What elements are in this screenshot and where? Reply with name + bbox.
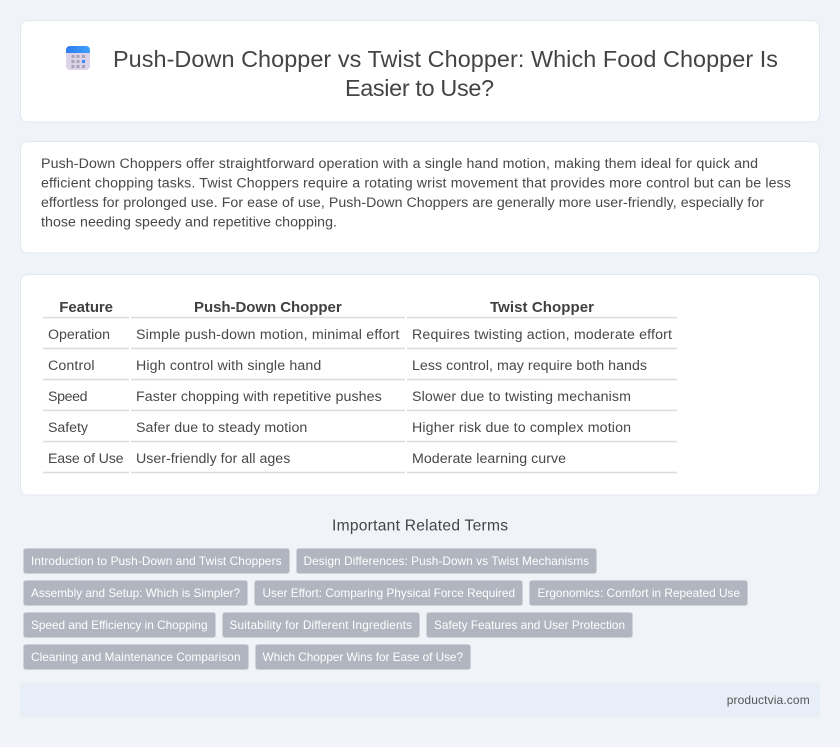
- chip: Assembly and Setup: Which is Simpler?: [31, 586, 240, 600]
- table row: ease of use: Moderate learning curve: [412, 451, 566, 467]
- text block: summary paragraph: [41, 156, 791, 230]
- title: Easier to Use?: [345, 75, 494, 101]
- text block: summary paragraph: effortless for prolonged use. For ease of use, Push-Down Choppers are generally more user-friendly, especially for: [41, 195, 764, 211]
- table row: safety: Higher risk due to complex motion: [412, 420, 631, 436]
- table header: Twist Chopper: [490, 299, 594, 316]
- table header: Push-Down Chopper: [194, 299, 342, 316]
- chip: Ergonomics: Comfort in Repeated Use: [538, 586, 740, 600]
- chip: User Effort: Comparing Physical Force Required: [262, 586, 515, 600]
- panel: header: [20, 20, 820, 122]
- table row: operation: Simple push-down motion, minimal effort: [136, 327, 399, 343]
- table row: control: High control with single hand: [136, 358, 321, 374]
- icon: calendar: [66, 46, 90, 70]
- chip: [24, 644, 248, 670]
- footer: productvia.com: [727, 693, 810, 707]
- chip: Design Differences: Push-Down vs Twist Mechanisms: [304, 554, 589, 568]
- footer: [20, 683, 820, 717]
- table row: speed: Faster chopping with repetitive pushes: [136, 389, 382, 405]
- title: [113, 46, 778, 101]
- table row: operation: Requires twisting action, moderate effort: [412, 327, 672, 343]
- table row: control: Control: [48, 358, 94, 374]
- table header: [59, 299, 594, 316]
- chip: Which Chopper Wins for Ease of Use?: [262, 650, 463, 664]
- panel: related term chips: [24, 548, 748, 670]
- chip: [222, 612, 420, 638]
- chip: Cleaning and Maintenance Comparison: [31, 650, 240, 664]
- chip: Suitability for Different Ingredients: [230, 618, 412, 632]
- panel: comparison table: [20, 274, 820, 495]
- chip: [256, 644, 470, 670]
- table row: speed: Slower due to twisting mechanism: [412, 389, 631, 405]
- chip: [296, 548, 596, 574]
- chip: Safety Features and User Protection: [434, 618, 625, 632]
- heading: related terms: Important Related Terms: [332, 518, 508, 534]
- chip: [426, 612, 632, 638]
- table row: safety: Safety: [48, 420, 89, 436]
- chip: [254, 580, 522, 606]
- table row: control: [48, 358, 647, 374]
- chip: Speed and Efficiency in Chopping: [31, 618, 208, 632]
- table row: safety: Safer due to steady motion: [136, 420, 307, 436]
- chip: [530, 580, 748, 606]
- chip: [24, 548, 290, 574]
- table row: safety: [48, 420, 631, 436]
- table row: speed: [48, 389, 631, 405]
- title: Push-Down Chopper vs Twist Chopper: Which Food Chopper Is: [113, 46, 778, 72]
- table row: ease of use: Ease of Use: [48, 451, 124, 467]
- panel: summary: [20, 142, 820, 253]
- table row: ease of use: [48, 451, 566, 467]
- chip: [24, 612, 216, 638]
- table row: operation: [48, 327, 672, 343]
- table header: Feature: [59, 299, 113, 316]
- table row: ease of use: User-friendly for all ages: [136, 451, 290, 467]
- table row: speed: Speed: [48, 389, 88, 405]
- chip: [24, 580, 248, 606]
- text block: summary paragraph: Push-Down Choppers offer straightforward operation with a single hand motion, making them ideal for quick and: [41, 156, 758, 172]
- text block: summary paragraph: efficient chopping tasks. Twist Choppers require a rotating wrist movement that provides more control but can be less: [41, 176, 791, 192]
- table row: control: Less control, may require both hands: [412, 358, 647, 374]
- chip: Introduction to Push-Down and Twist Choppers: [31, 554, 282, 568]
- text block: summary paragraph: those needing speedy and repetitive chopping.: [41, 214, 337, 230]
- table row: operation: Operation: [48, 327, 110, 343]
